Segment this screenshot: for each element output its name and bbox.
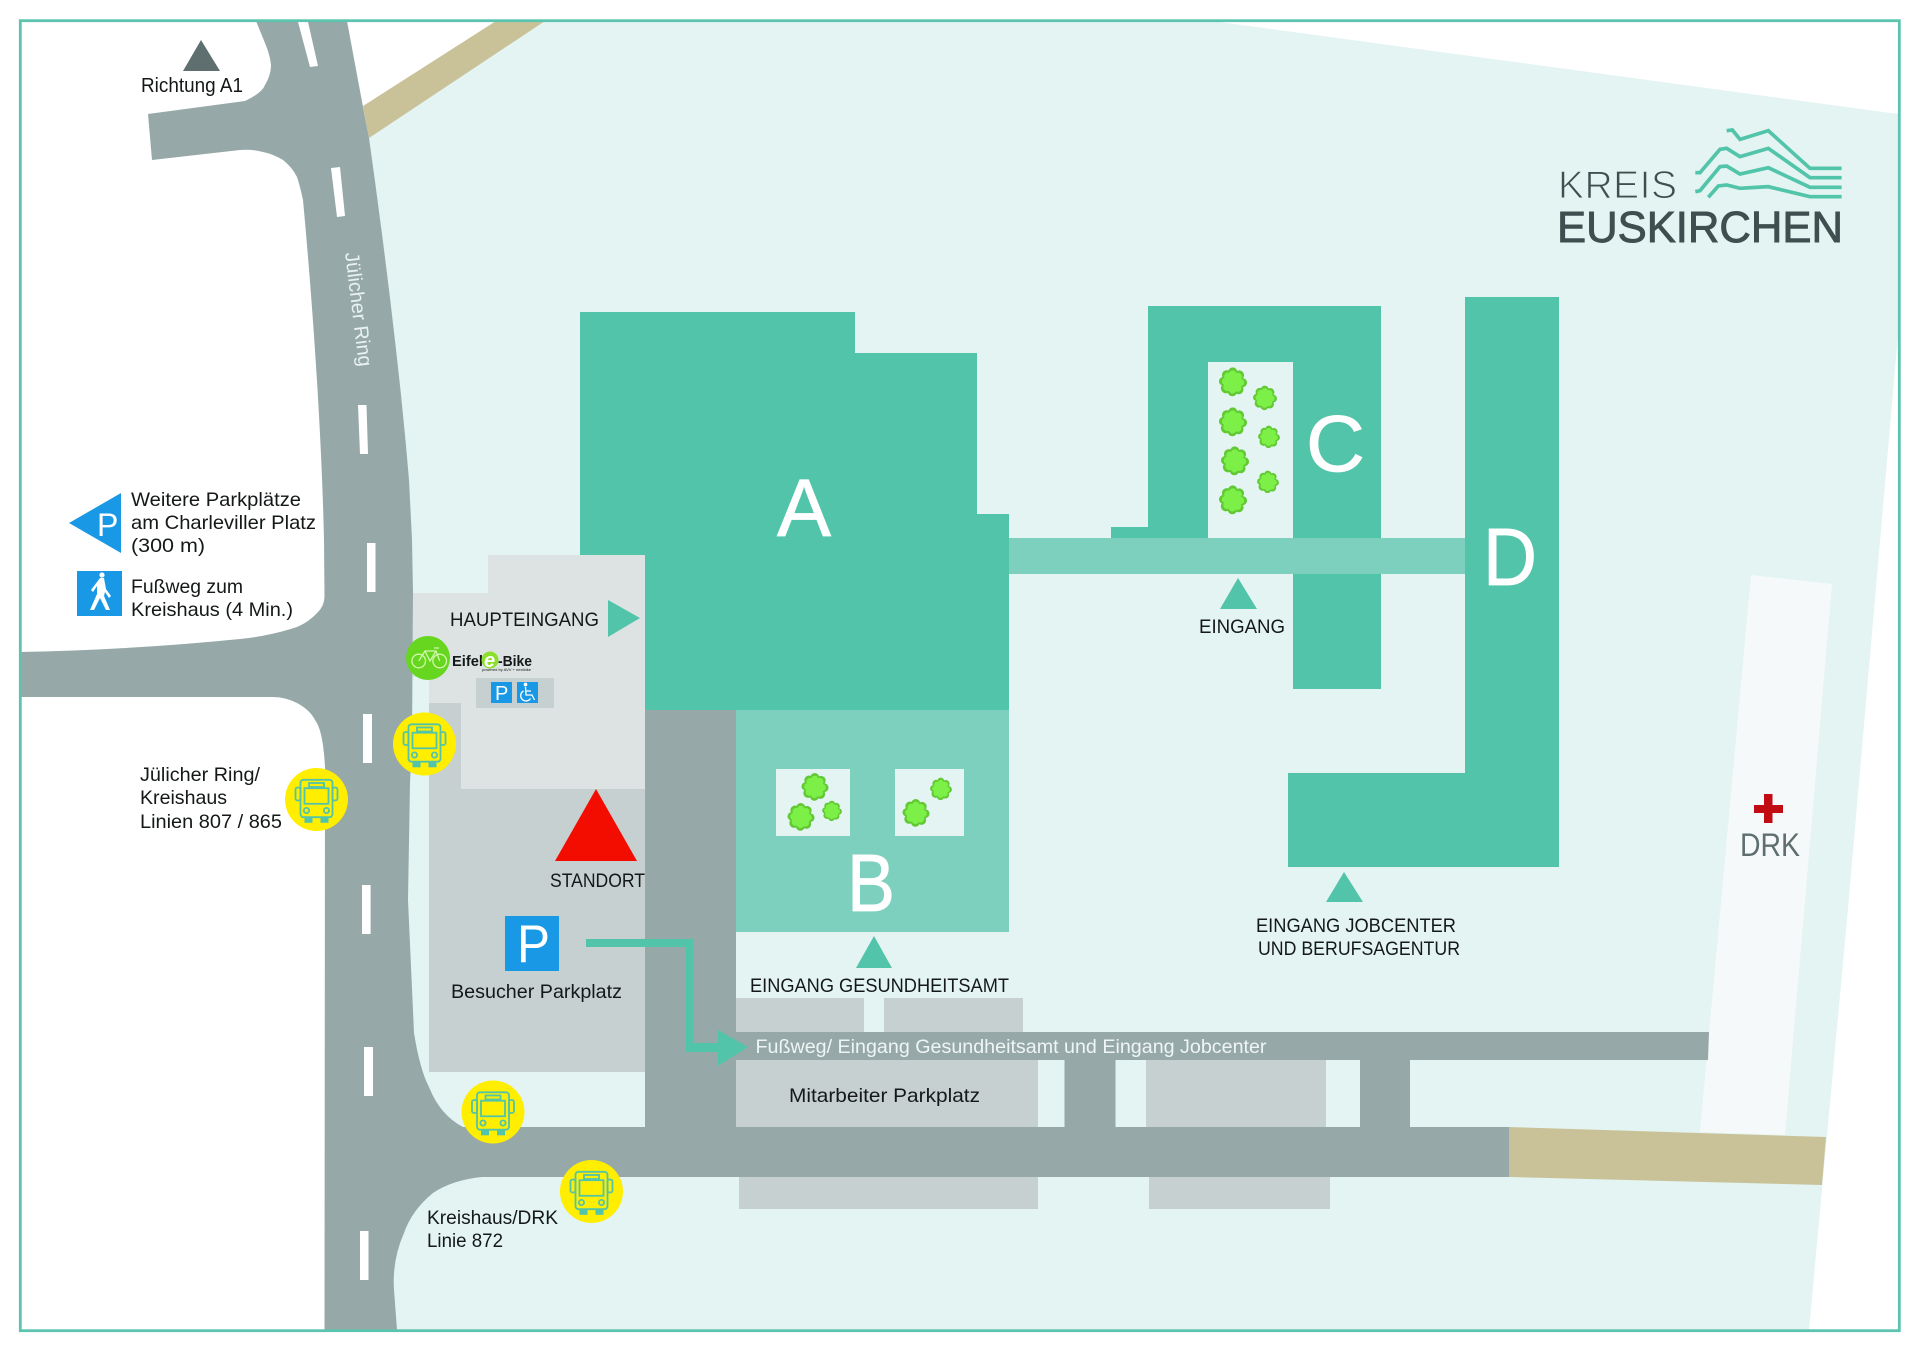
letter C: C bbox=[1306, 399, 1365, 488]
entrance: Jobcenter bbox=[1256, 872, 1460, 960]
logo: Kreis Euskirchen: KREIS bbox=[1558, 164, 1677, 207]
marker: Standort: STANDORT bbox=[550, 871, 645, 892]
path: tan road east bbox=[1509, 1127, 1826, 1185]
entrance: Jobcenter: UND BERUFSAGENTUR bbox=[1258, 939, 1460, 960]
bus stop: Jülicher Ring west bbox=[140, 764, 348, 833]
visitor parking sign bbox=[451, 915, 622, 1003]
building A bbox=[580, 312, 1009, 710]
logo: Kreis Euskirchen bbox=[1557, 130, 1843, 252]
icon: pedestrian bbox=[90, 572, 111, 610]
label: footpath: Fußweg/ Eingang Gesundheitsamt und Eingang Jobcenter bbox=[756, 1037, 1267, 1058]
entrance: building C bbox=[1199, 578, 1285, 638]
bus stop: Jülicher Ring west: Kreishaus bbox=[140, 787, 227, 809]
entrance: Gesundheitsamt bbox=[750, 936, 1009, 997]
legend: further parking: Weitere Parkplätze bbox=[131, 489, 301, 511]
corridor between buildings bbox=[1009, 538, 1465, 574]
bus stop: Kreishaus DRK bbox=[427, 1160, 623, 1252]
path: DRK strip bbox=[1700, 575, 1832, 1135]
street name: Jülicher Ring bbox=[340, 251, 376, 368]
parking: upper forecourt bbox=[413, 555, 645, 789]
arrow: footpath route bbox=[586, 939, 748, 1066]
marker: DRK bbox=[1740, 794, 1800, 863]
disabled parking sign bbox=[476, 678, 554, 708]
main entrance: HAUPTEINGANG bbox=[450, 610, 599, 631]
visitor parking sign: P bbox=[517, 915, 550, 974]
label: staff parking: Mitarbeiter Parkplatz bbox=[789, 1085, 980, 1107]
legend: walking route: Fußweg zum bbox=[131, 576, 243, 598]
letter D: D bbox=[1483, 512, 1537, 603]
bus stop: Jülicher Ring west: Linien 807 / 865 bbox=[140, 811, 282, 833]
visitor parking sign: Besucher Parkplatz bbox=[451, 981, 622, 1003]
logo: Eifel e-Bike: powered by AVV + nextbike bbox=[482, 668, 531, 672]
legend: walking route: Kreishaus (4 Min.) bbox=[131, 599, 293, 621]
logo: Kreis Euskirchen: EUSKIRCHEN bbox=[1557, 204, 1843, 252]
legend: walking route bbox=[77, 571, 293, 621]
entrance: building C: EINGANG bbox=[1199, 617, 1285, 638]
entrance: Jobcenter: EINGANG JOBCENTER bbox=[1256, 916, 1456, 937]
background: site ground bbox=[360, 21, 1898, 1330]
bus stop: Jülicher Ring west: Jülicher Ring/ bbox=[140, 764, 261, 786]
parking: visitor lot bbox=[429, 703, 645, 1072]
marker: Standort bbox=[550, 789, 645, 892]
legend: further parking: P bbox=[97, 507, 118, 543]
letter A: A bbox=[777, 463, 831, 554]
marker: Richtung A1: Richtung A1 bbox=[141, 74, 243, 97]
main entrance bbox=[450, 600, 640, 637]
marker: Richtung A1 bbox=[141, 40, 243, 97]
icon: wheelchair bbox=[521, 683, 534, 701]
logo: Eifel e-Bike: e bbox=[484, 650, 495, 672]
legend: further parking: (300 m) bbox=[131, 535, 205, 557]
bus stop: Jülicher Ring east bbox=[393, 712, 456, 776]
parking: staff lots bbox=[736, 998, 1330, 1209]
letter B: B bbox=[847, 838, 895, 929]
logo: Eifel e-Bike: Eifel bbox=[452, 653, 483, 670]
logo: Eifel e-Bike: -Bike bbox=[498, 653, 532, 670]
logo waves bbox=[1695, 130, 1842, 197]
bus stop: Kreishaus DRK: Linie 872 bbox=[427, 1230, 503, 1252]
building B bbox=[736, 710, 1009, 932]
bus stop: Kreishaus DRK: Kreishaus/DRK bbox=[427, 1207, 558, 1229]
marker: DRK: DRK bbox=[1740, 827, 1800, 863]
legend: further parking: am Charleviller Platz bbox=[131, 512, 316, 534]
bus stop: north of access road bbox=[462, 1080, 524, 1144]
entrance: Gesundheitsamt: EINGANG GESUNDHEITSAMT bbox=[750, 976, 1009, 997]
icon: e-bike station bbox=[406, 636, 450, 680]
building C bbox=[1111, 306, 1381, 689]
road markings bbox=[298, 22, 376, 1280]
building D bbox=[1288, 297, 1559, 867]
logo: Eifel e-Bike bbox=[452, 650, 532, 672]
legend: further parking bbox=[69, 489, 316, 557]
disabled parking sign: P bbox=[495, 683, 508, 705]
path: tan road top bbox=[363, 21, 545, 138]
